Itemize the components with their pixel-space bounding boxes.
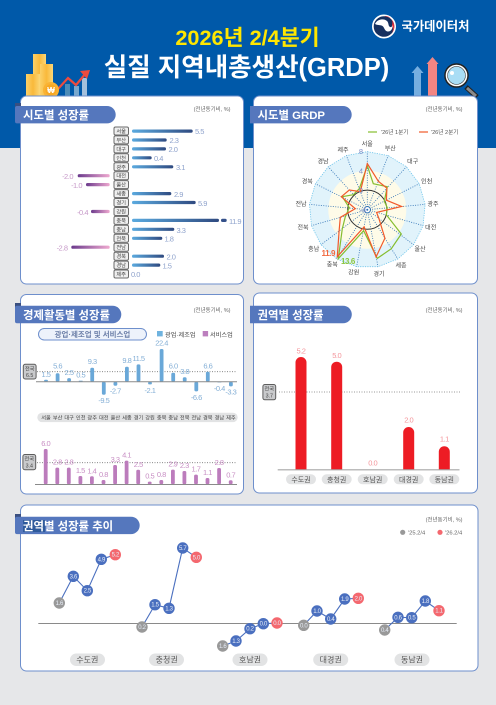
horizontal bar chart: 3.3 [176, 226, 186, 235]
bar chart: mining and manufacturing [36, 338, 237, 405]
line chart: dongnam: 0.4 [381, 628, 389, 634]
horizontal bar chart: 서울 [116, 127, 126, 135]
logo: national data agency [372, 14, 469, 38]
bar chart: blocs: 1.1 [440, 434, 449, 444]
radar region labels: 충북 [327, 261, 338, 269]
horizontal bar chart: 11.9 [229, 217, 241, 226]
horizontal bar chart: -2.0 [62, 172, 73, 181]
national badge: 3.4 [23, 454, 36, 470]
horizontal bar chart: 0.4 [154, 154, 163, 163]
bar chart: services: 1.1 [203, 468, 212, 477]
title: main: 실질 지역내총생산(GRDP) [104, 54, 389, 82]
line chart: capital area: 5.2 [112, 553, 120, 559]
bar chart: mining and manufacturing: -0.4 [214, 384, 225, 393]
bar chart: services: 2.8 [53, 458, 62, 467]
region label strip: 전남 [192, 414, 201, 422]
legend [368, 128, 458, 136]
bar chart: mining and manufacturing: 6.6 [203, 362, 213, 370]
horizontal bar chart: 제주 [116, 270, 126, 278]
radar axis ticks: 0 [359, 186, 363, 195]
radar region labels: 부산 [385, 144, 396, 152]
radar region labels: 전북 [297, 224, 309, 232]
line chart: daegyeong: 2.0 [355, 596, 363, 602]
horizontal bar chart: 대전 [116, 172, 126, 180]
bar chart: services: 4.1 [122, 451, 131, 460]
panel heading [15, 517, 140, 534]
panel: growth by economic bloc [250, 293, 478, 493]
subheading pill: 광업·제조업 및 서비스업 [55, 329, 130, 339]
radar region labels: 울산 [414, 245, 426, 253]
bar chart: blocs [278, 346, 460, 470]
legend: '26년 2분기 [431, 128, 458, 136]
region label strip: 경기 [134, 414, 143, 422]
header band [0, 0, 496, 148]
bar chart: services: 0.8 [157, 470, 166, 479]
icon: coins and rising arrow [26, 54, 90, 98]
line chart: capital area: 2.5 [84, 589, 92, 595]
bloc labels: 대경권 [399, 475, 418, 484]
legend [157, 331, 233, 339]
horizontal bar chart: 인천 [116, 155, 126, 162]
horizontal bar chart: 1.8 [164, 234, 174, 244]
line chart: chungcheong: 1.3 [165, 606, 174, 612]
horizontal bar chart: 2.0 [166, 252, 176, 262]
bar chart: mining and manufacturing: -2.7 [110, 386, 121, 396]
bar chart: mining and manufacturing: -2.1 [145, 386, 156, 395]
bar chart: services: 1.5 [76, 466, 85, 475]
bar chart: services: 2.8 [64, 458, 74, 467]
radar region labels: 대구 [407, 158, 419, 166]
trend baseline [38, 622, 457, 624]
panel heading [250, 106, 352, 123]
region label strip: 인천 [76, 414, 86, 422]
horizontal bar chart: 2.9 [174, 190, 183, 199]
legend [400, 530, 463, 536]
unit note: (전년동기비, %) [426, 516, 463, 524]
horizontal bar chart: 충북 [116, 216, 126, 224]
logo: national data agency: 국가데이터처 [402, 19, 469, 34]
legend: '26.2/4 [445, 530, 463, 536]
radar region labels: 서울 [362, 140, 373, 148]
radar peak values: 11.9 [322, 249, 336, 258]
bar chart: mining and manufacturing: 5.6 [53, 362, 62, 370]
bar chart: services: 0.5 [145, 472, 154, 481]
bar chart: blocs: 5.2 [297, 346, 306, 356]
bar chart: mining and manufacturing: 11.5 [132, 354, 145, 363]
region label strip: 제주 [226, 414, 236, 422]
bar chart: mining and manufacturing: -9.5 [98, 396, 110, 405]
legend: 서비스업 [210, 331, 233, 339]
bloc labels: 동남권 [435, 475, 454, 484]
national badge: 3.4: 3.4 [26, 463, 33, 469]
bar chart: services: 2.5 [134, 460, 143, 469]
national badge: 3.7: 전국 [264, 386, 274, 393]
national badge: 3.7 [263, 384, 276, 400]
horizontal bar chart: 2.3 [170, 136, 179, 145]
bar chart: mining and manufacturing: 9.8 [122, 356, 132, 365]
bar chart: mining and manufacturing: 9.3 [88, 357, 97, 366]
panel heading: 권역별 성장률 [258, 309, 324, 322]
bloc labels: 충청권 [327, 475, 346, 484]
line chart: dongnam [379, 595, 445, 636]
radar region labels: 경북 [302, 179, 313, 186]
line chart: honam: 1.6 [219, 644, 227, 650]
bar chart: mining and manufacturing: 0.5 [76, 370, 85, 380]
radar region labels: 광주 [427, 201, 439, 208]
region label strip: 부산 [53, 414, 63, 422]
horizontal bar chart: -0.4 [77, 208, 88, 217]
bloc labels [286, 474, 459, 484]
panel heading [15, 306, 121, 323]
line chart: honam [217, 617, 283, 652]
region label strip: 대전 [99, 414, 109, 422]
region label strip: 광주 [87, 414, 97, 422]
line chart: dongnam: 1.1 [435, 609, 444, 615]
icon: coins and rising arrow: ₩ [47, 86, 55, 95]
bar chart: services: 2.9 [168, 460, 178, 469]
horizontal bar chart: 5.5 [195, 127, 204, 136]
horizontal bar chart: 경남 [116, 261, 126, 269]
radar region labels: 전남 [295, 200, 307, 208]
horizontal bar chart: 경북 [116, 253, 126, 260]
icon: up arrows and magnifier [412, 57, 477, 97]
radar region labels: 제주 [337, 146, 349, 154]
bloc labels: 수도권 [291, 476, 311, 484]
horizontal bar chart: 전남 [116, 243, 126, 251]
radar axis ticks [359, 147, 366, 214]
radar peak values: 13.6 [341, 257, 356, 266]
horizontal bar chart: 2.0 [168, 145, 178, 154]
bar chart: mining and manufacturing: 2.5 [65, 368, 74, 377]
bar chart: services: 2.8 [215, 458, 224, 467]
radar region labels: 인천 [421, 178, 432, 186]
line chart: chungcheong: 1.5 [151, 603, 160, 609]
panel heading [250, 306, 352, 323]
radar region labels: 경남 [317, 158, 329, 166]
bloc labels: 호남권 [363, 475, 382, 484]
unit note: (전년동기비, %) [426, 306, 463, 314]
line chart: capital area: 4.9 [98, 557, 106, 563]
bar chart: services: 6.0 [41, 439, 50, 448]
horizontal bar chart: 세종 [116, 190, 126, 198]
bloc labels: 대경권 [320, 654, 342, 664]
line chart: chungcheong: 5.0 [193, 555, 201, 561]
bar chart: mining and manufacturing: 6.0 [169, 362, 178, 370]
line chart: daegyeong: 1.9 [341, 597, 349, 603]
panel: growth by economic activity [15, 294, 244, 494]
bloc labels: 충청권 [156, 654, 178, 664]
horizontal bar chart: 경기 [116, 198, 126, 206]
panel heading [15, 106, 116, 123]
bloc labels: 호남권 [239, 654, 261, 664]
legend: '26년 1분기 [381, 128, 408, 136]
bar chart: mining and manufacturing: -3.3 [225, 388, 237, 396]
line chart: daegyeong: 1.0 [313, 609, 322, 615]
radar axis ticks: 8 [359, 147, 363, 156]
radar peak values [322, 249, 356, 266]
legend: 광업·제조업 [165, 331, 196, 339]
line chart: dongnam: 0.5 [408, 616, 416, 622]
line chart: honam: 1.3 [232, 639, 241, 645]
horizontal bar chart [57, 127, 241, 279]
bar chart: blocs: 2.0 [404, 416, 413, 424]
region label strip: 충남 [168, 414, 178, 422]
radar axis ticks: -4 [360, 206, 366, 214]
national badge: 3.7: 3.7 [266, 394, 273, 400]
national badge: 6.5 [23, 364, 36, 379]
panel: GRDP radar by province [250, 96, 478, 284]
bar chart: blocs: 5.0 [332, 351, 341, 360]
region label strip [37, 413, 238, 422]
radar region labels: 충남 [308, 245, 320, 253]
subheading pill [38, 328, 146, 340]
horizontal bar chart: 3.1 [176, 163, 185, 172]
line chart: chungcheong: 5.7 [179, 546, 187, 552]
bloc labels: 동남권 [401, 654, 423, 664]
panel heading: 시도별 GRDP [258, 109, 325, 122]
line chart: honam: 0.0 [273, 621, 282, 627]
region label strip: 대구 [64, 414, 74, 422]
region label strip: 충북 [157, 414, 167, 422]
bar chart: services: 1.7 [192, 465, 201, 474]
region label strip: 서울 [41, 414, 51, 422]
line chart: dongnam: 1.8 [422, 599, 430, 605]
bar chart: services: 1.4 [87, 466, 97, 475]
panel heading: 시도별 성장률 [23, 109, 90, 122]
radar region labels: 강원 [348, 269, 359, 277]
horizontal bar chart: 강원 [116, 208, 126, 216]
bar chart: mining and manufacturing: 1.5 [42, 370, 51, 379]
radar axis ticks: 4 [359, 166, 363, 176]
line chart: capital area [54, 549, 121, 609]
horizontal bar chart: -1.0 [71, 181, 82, 190]
horizontal bar chart: 대구 [116, 145, 126, 153]
region label strip: 울산 [111, 414, 120, 422]
unit note: (전년동기비, %) [194, 105, 231, 113]
bar chart: services [35, 439, 237, 484]
bar chart: services: 0.8 [99, 470, 108, 479]
bar chart: services: 0.7 [226, 470, 235, 479]
national badge: 6.5: 전국 [25, 366, 35, 372]
horizontal bar chart: 1.5 [162, 262, 172, 270]
unit note: (전년동기비, %) [426, 105, 463, 113]
bar chart: mining and manufacturing: 3.8 [180, 367, 189, 376]
line chart: capital area: 1.6 [56, 601, 64, 607]
national badge: 6.5: 6.5 [26, 373, 33, 379]
line chart: daegyeong: 0.4 [327, 617, 335, 623]
horizontal bar chart: 5.9 [198, 199, 207, 208]
bloc labels [70, 654, 430, 666]
line chart: capital area: 3.6 [70, 574, 78, 580]
horizontal bar chart: 광주 [116, 164, 126, 171]
bar chart: services: 2.3 [180, 461, 189, 470]
region label strip: 경남 [215, 414, 224, 422]
region label strip: 경북 [203, 414, 213, 422]
national badge: 3.4: 전국 [24, 456, 34, 463]
panel heading: 권역별 성장률 추이 [23, 520, 113, 533]
unit note: (전년동기비, %) [194, 306, 231, 314]
line chart: dongnam: 0.6 [394, 615, 403, 621]
line chart: chungcheong: 0.2 [138, 625, 147, 631]
panel: growth by province [15, 96, 244, 284]
horizontal bar chart: 울산 [116, 181, 126, 189]
line chart: honam: 0.0 [260, 622, 268, 628]
panel heading: 경제활동별 성장률 [23, 308, 111, 322]
region label strip: 전북 [180, 414, 190, 422]
radar chart [310, 152, 425, 267]
line chart: chungcheong [136, 542, 202, 633]
title: period: 2026년 2/4분기 [175, 25, 320, 50]
bloc labels: 수도권 [76, 654, 98, 664]
radar region labels: 대전 [425, 224, 436, 232]
legend: '25.2/4 [408, 530, 426, 536]
line chart: daegyeong [298, 593, 364, 631]
panel: bloc growth trend [15, 505, 478, 671]
radar region labels: 세종 [395, 262, 407, 270]
horizontal bar chart: -2.8 [57, 244, 68, 252]
line chart: daegyeong: 0.0 [300, 623, 308, 629]
horizontal bar chart: 0.0 [131, 270, 140, 279]
region label strip: 세종 [122, 414, 132, 422]
bar chart: blocs: 0.0 [368, 458, 377, 468]
line chart: honam: 0.2 [246, 627, 255, 633]
radar region labels: 경기 [373, 270, 385, 278]
bar chart: mining and manufacturing: 22.4 [155, 338, 168, 348]
horizontal bar chart: 충남 [116, 225, 126, 233]
radar region labels [295, 140, 439, 278]
region label strip: 강원 [145, 414, 155, 422]
bar chart: mining and manufacturing: -6.6 [191, 393, 202, 402]
horizontal bar chart: 전북 [116, 235, 126, 242]
horizontal bar chart: 부산 [116, 136, 126, 144]
bar chart: services: 3.3 [111, 455, 120, 464]
